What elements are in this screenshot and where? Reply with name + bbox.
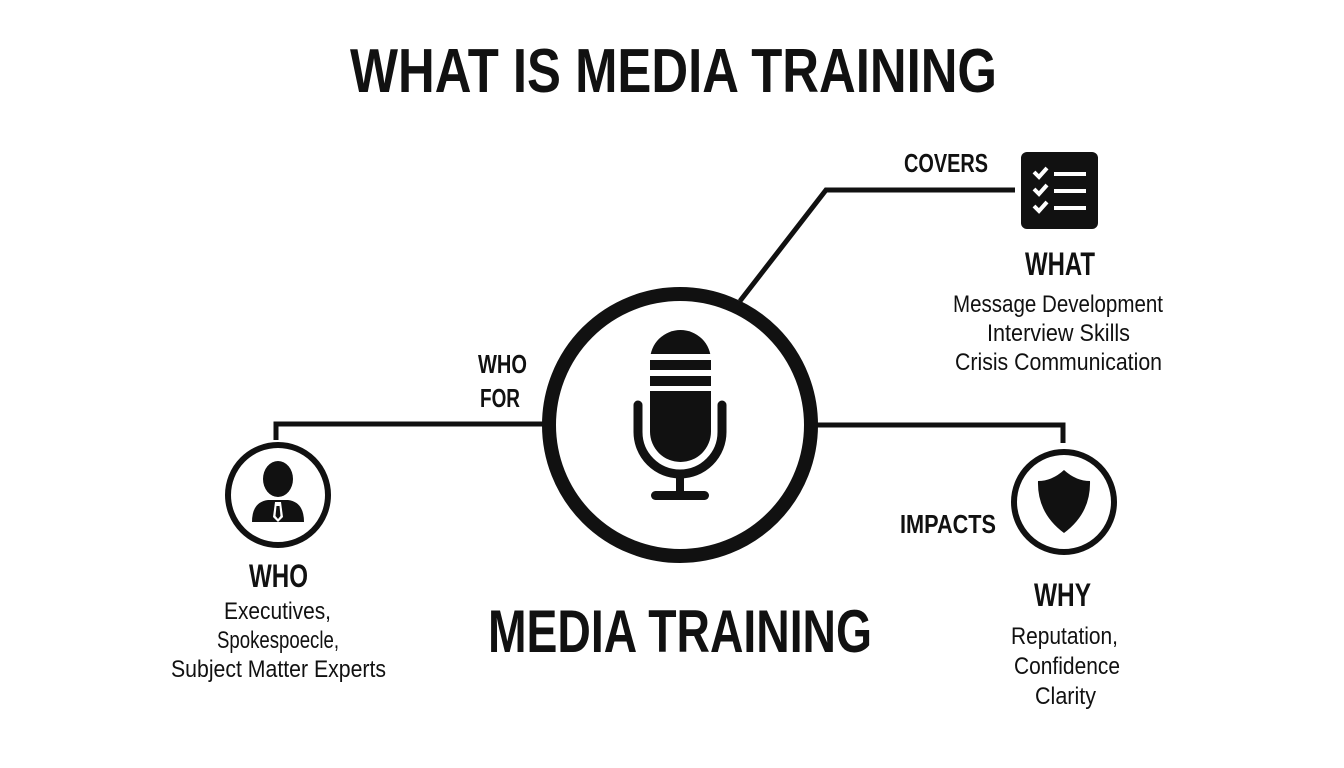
text block: what: WHAT [1025, 246, 1095, 282]
text block: who: Executives, [224, 598, 331, 625]
label: who for: FOR [480, 383, 520, 413]
text block: who [171, 558, 386, 683]
icon: person circle [228, 445, 328, 545]
text block: why: WHY [1034, 577, 1091, 613]
heading: media training: MEDIA TRAINING [488, 598, 872, 665]
text block: why: Confidence [1014, 653, 1120, 680]
text block: what: Crisis Communication [955, 349, 1162, 376]
text block: what [953, 246, 1163, 376]
icon: checklist [1021, 152, 1098, 229]
icon: microphone [638, 330, 722, 500]
text block: why: Reputation, [1011, 623, 1118, 650]
text block: who: Subject Matter Experts [171, 656, 386, 683]
label: covers: COVERS [904, 148, 988, 178]
text block: what: Message Development [953, 291, 1163, 318]
text block: who: Spokespoecle, [217, 627, 339, 654]
text block: why: Clarity [1035, 683, 1096, 710]
connector lines [276, 190, 1063, 443]
label: impacts: IMPACTS [900, 509, 996, 539]
icon: shield circle [1014, 452, 1114, 552]
text block: who: WHO [249, 558, 308, 594]
text block: what: Interview Skills [987, 320, 1130, 347]
label: who for [478, 349, 527, 413]
central circle: microphone [549, 294, 811, 556]
text block: why [1011, 577, 1120, 710]
title: WHAT IS MEDIA TRAINING [350, 37, 997, 106]
label: who for: WHO [478, 349, 527, 379]
